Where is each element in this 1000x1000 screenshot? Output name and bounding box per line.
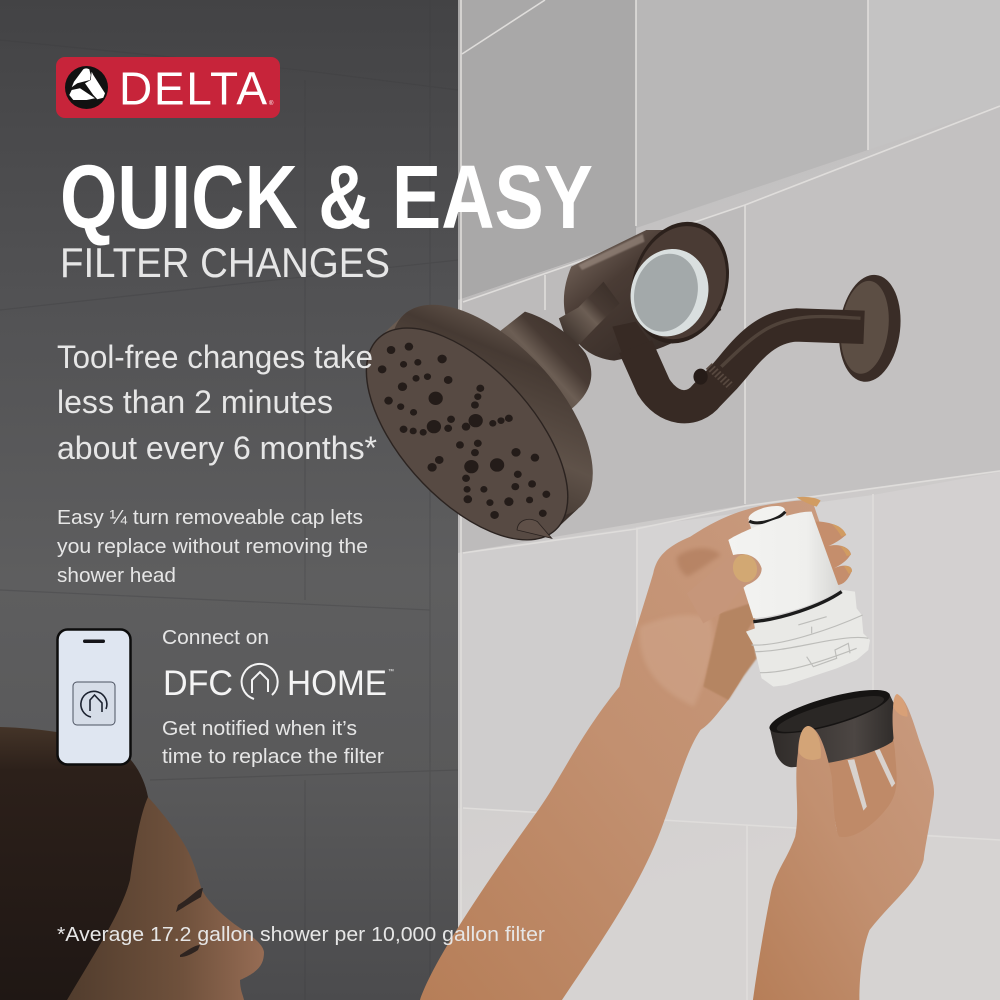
main benefit text: less than 2 minutes [57, 384, 333, 420]
shower arm [612, 317, 864, 407]
shadow between thumb and index [677, 548, 721, 577]
main benefit text: about every 6 months* [57, 430, 377, 466]
shower head and filter assembly [329, 212, 906, 572]
spray face with nozzles [329, 296, 606, 572]
filter cartridge [728, 503, 870, 687]
connect on label: Connect on [162, 626, 269, 649]
notification text: Get notified when it’s [162, 717, 357, 740]
arm and upper hand [420, 500, 822, 1000]
hand under filter [703, 603, 757, 700]
lower hand holding cap [753, 681, 934, 1000]
logo wordmark: DELTA [119, 62, 267, 114]
filter and fingers held in hand [687, 497, 870, 700]
cap description text: Easy ¼ turn removeable cap lets [57, 506, 363, 529]
fingers behind cap [822, 733, 902, 843]
fingers behind filter [797, 497, 852, 585]
gaps between fingers [848, 749, 895, 811]
logo: Delta [56, 57, 280, 118]
palm highlight [639, 615, 713, 707]
title: QUICK & EASY [60, 148, 593, 248]
rim of shower head [354, 273, 631, 549]
DFC Home logo: HOME [287, 664, 387, 703]
DFC Home logo [163, 664, 394, 703]
logo: Delta: ® [269, 100, 274, 107]
logo mark [65, 66, 108, 109]
DFC Home logo: DFC [163, 664, 233, 703]
thumb with nail [687, 552, 762, 623]
nails on lower hand [799, 694, 908, 760]
hand silhouette [753, 695, 934, 1000]
housing highlight [578, 234, 645, 270]
neck connector [559, 282, 620, 345]
head neck cylinder [496, 312, 591, 412]
footnote: *Average 17.2 gallon shower per 10,000 gallon filter [57, 924, 545, 946]
filter housing body [564, 230, 721, 361]
main benefit text [57, 339, 377, 466]
black removable cap [766, 681, 900, 767]
cap description text [57, 506, 368, 587]
filter opening [618, 212, 742, 353]
main benefit text: Tool-free changes take [57, 339, 373, 375]
cap description text: shower head [57, 564, 176, 587]
notification text [162, 717, 384, 768]
DFC Home logo: ™ [388, 668, 394, 675]
arm and palm silhouette [420, 500, 822, 1000]
eyebrow and eye [176, 888, 203, 957]
face [60, 790, 264, 1000]
subtitle: FILTER CHANGES [60, 239, 390, 286]
hair [0, 727, 148, 1000]
icon: smartphone with app [58, 630, 130, 764]
dark translucent left panel [0, 0, 458, 1000]
cap description text: you replace without removing the [57, 535, 368, 558]
wall flange [834, 272, 906, 385]
notification text: time to replace the filter [162, 745, 384, 768]
person: head and hair [0, 727, 264, 1000]
